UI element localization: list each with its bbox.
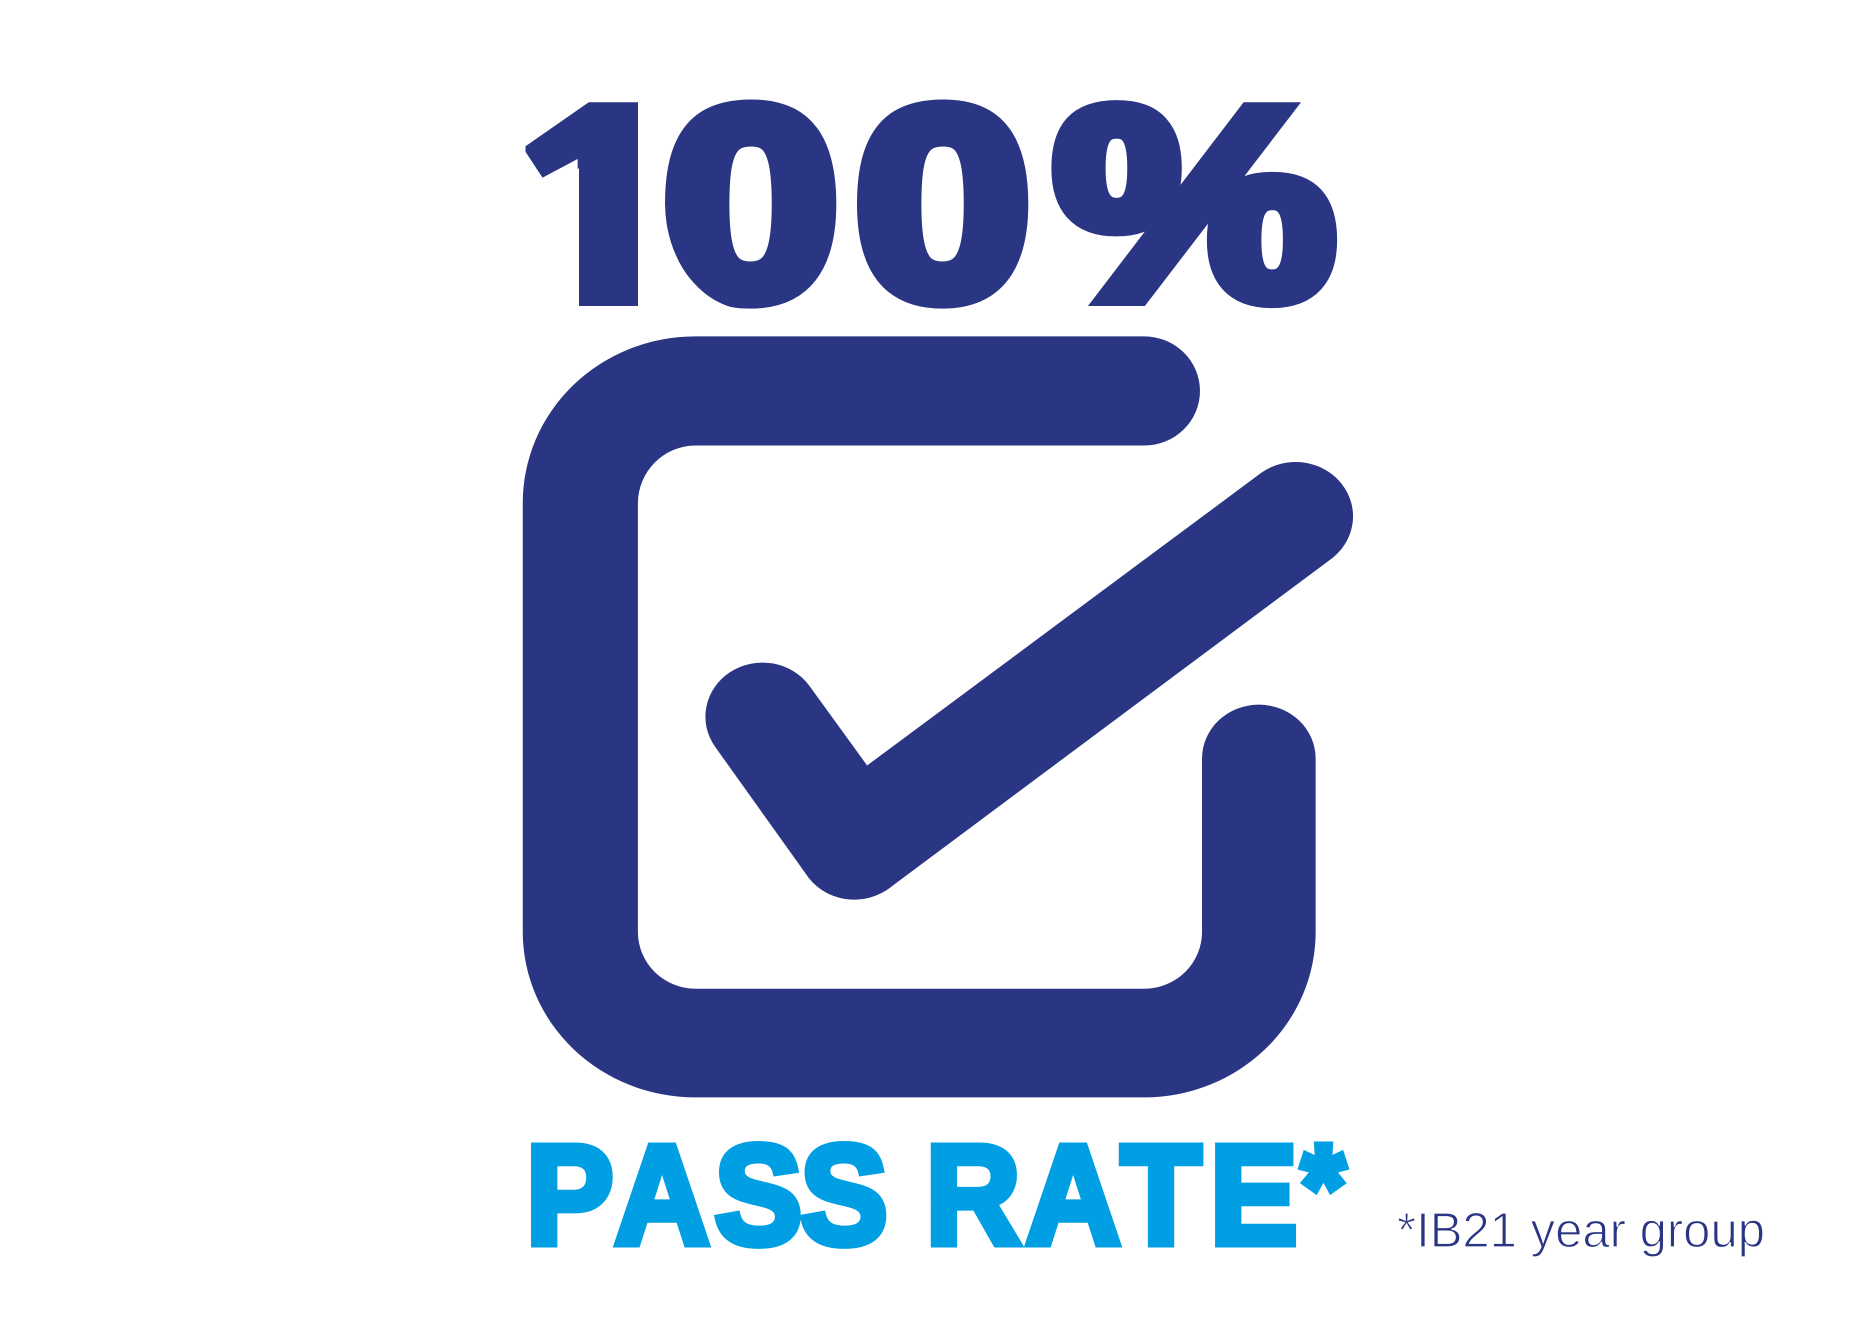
- infographic: [522, 100, 1762, 1256]
- footnote: *IB21 year group: [1397, 1204, 1765, 1258]
- heading: PASS RATE: PASS RATE: [526, 1116, 1297, 1274]
- icon: check mark: [705, 462, 1353, 900]
- heading: 100%: 100%: [514, 54, 1335, 355]
- icon: open rounded checkbox: [523, 336, 1316, 1097]
- heading: PASS RATE: *: [1302, 1121, 1345, 1252]
